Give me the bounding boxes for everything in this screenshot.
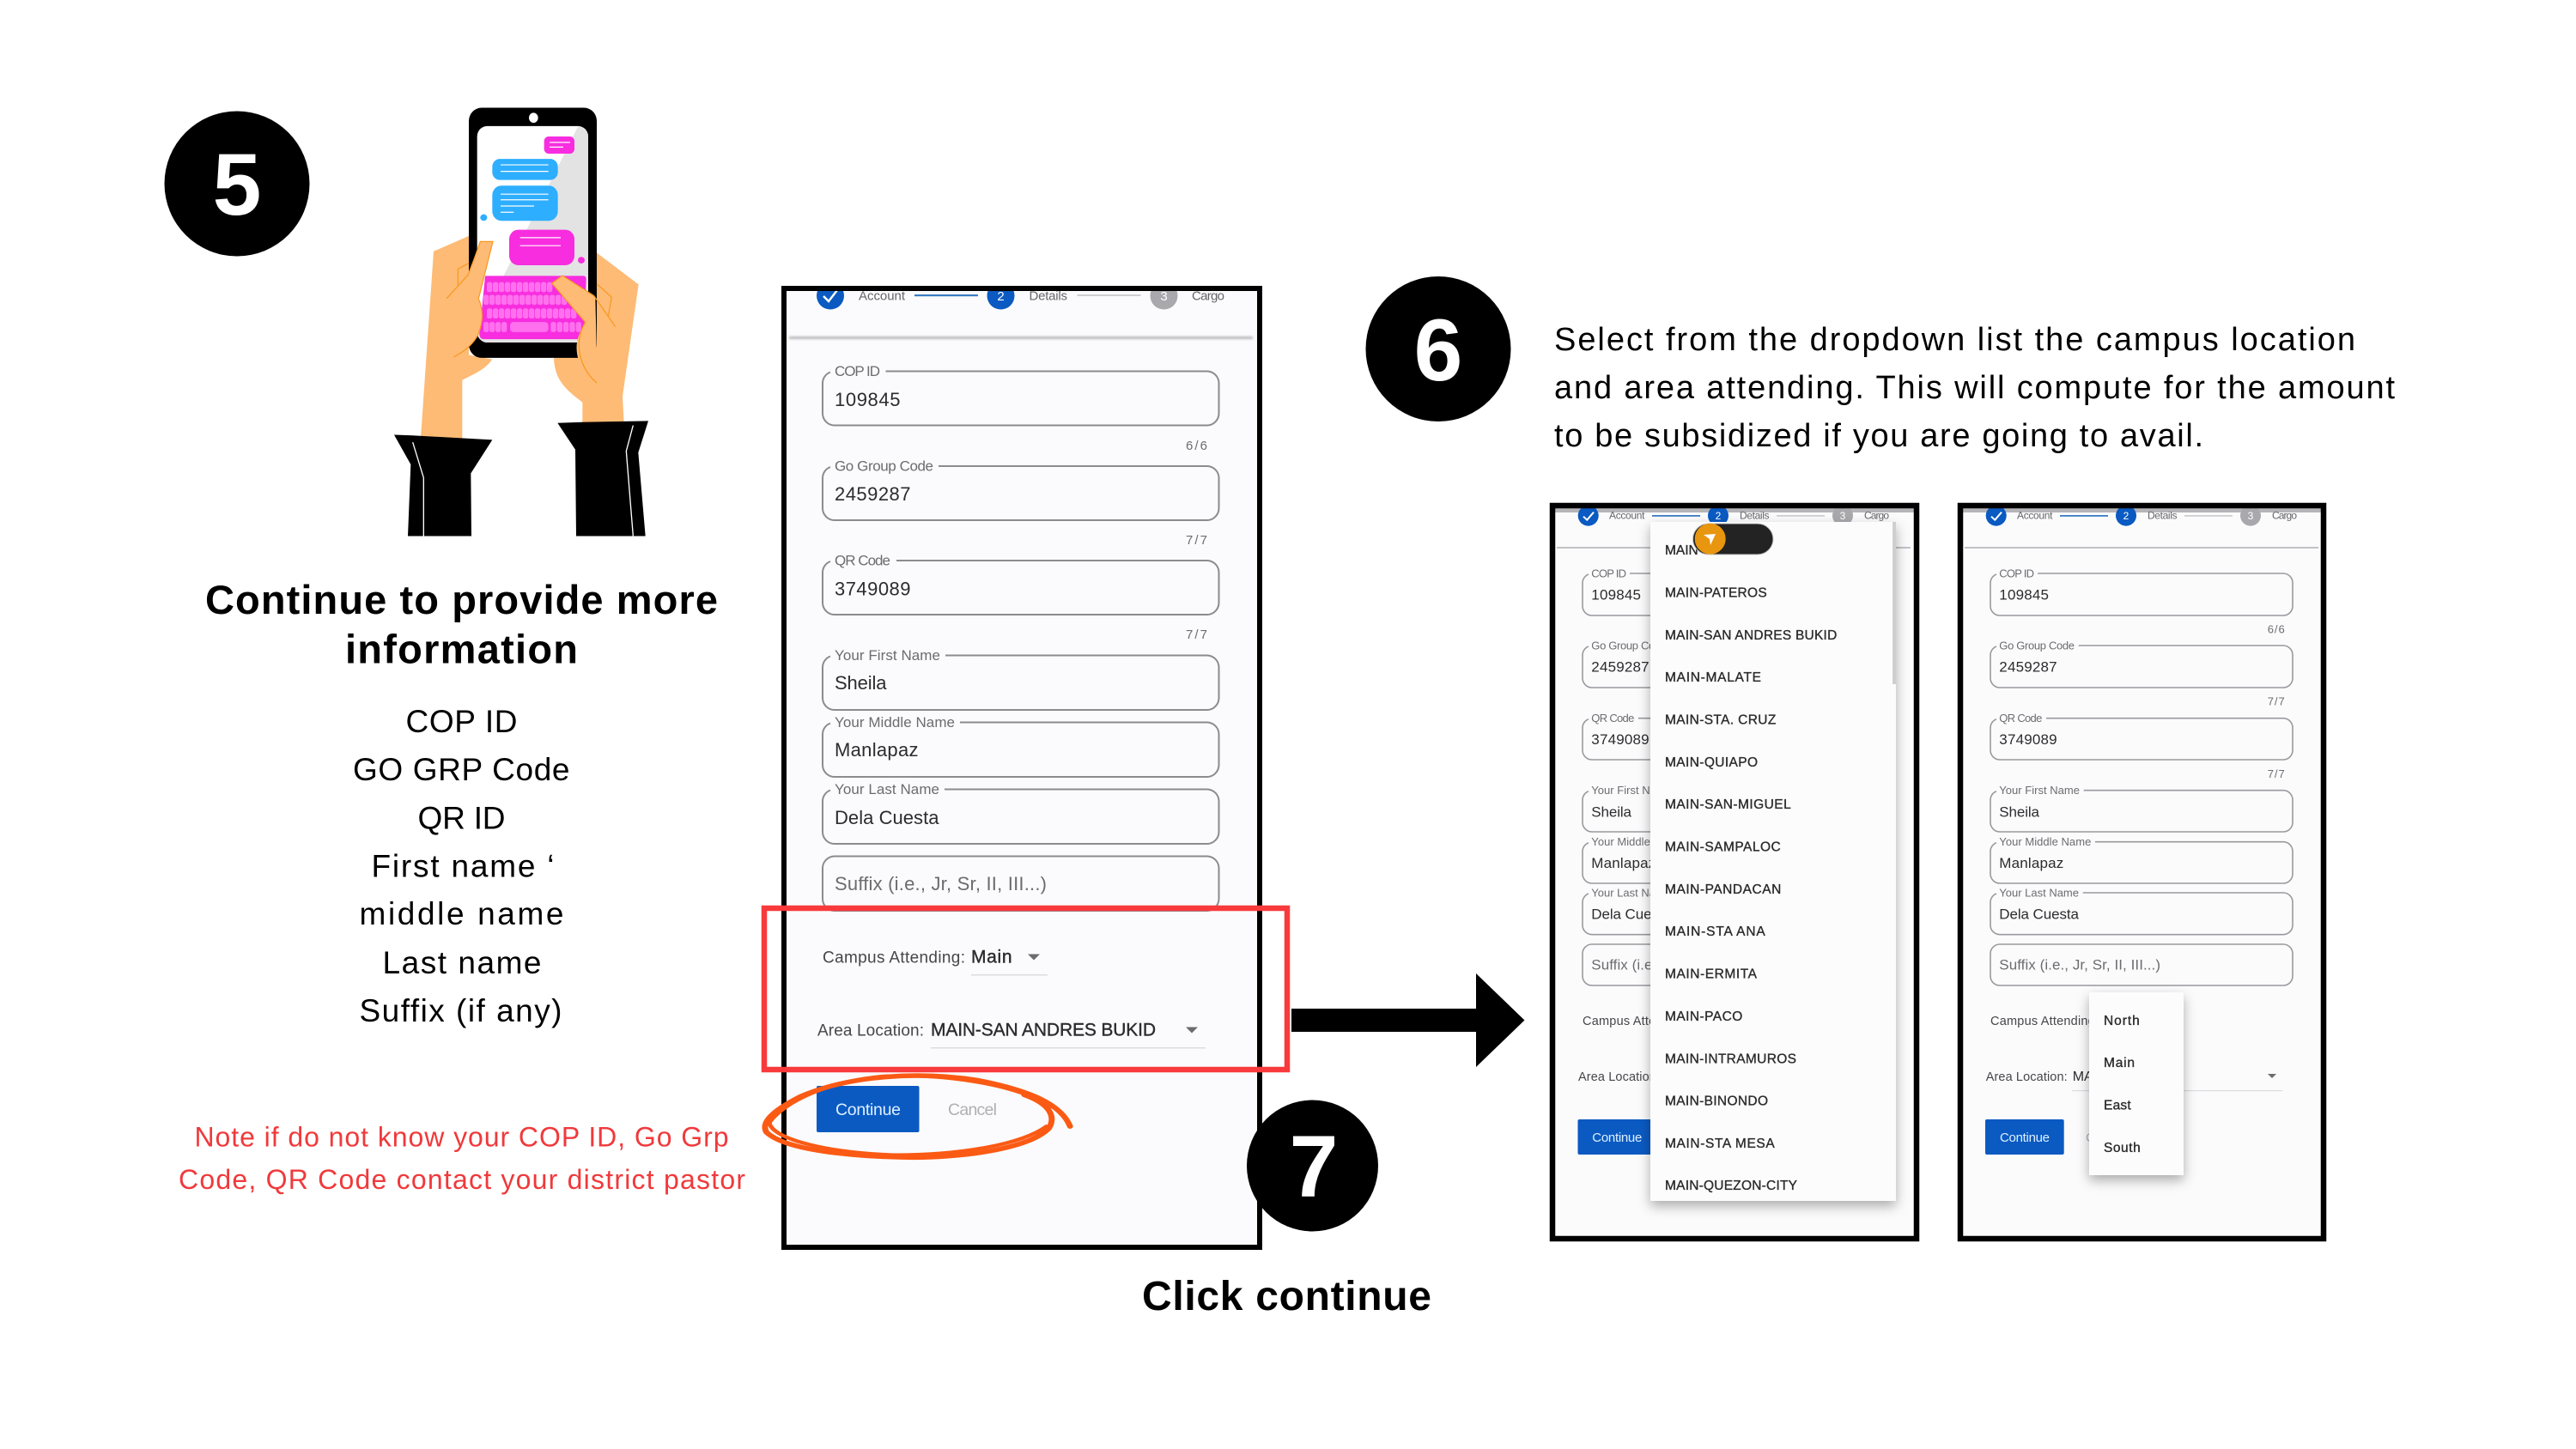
select: area location: MAIN bbox=[2073, 1070, 2107, 1084]
dropdown menu: area locations: MAIN-BINONDO bbox=[1665, 1094, 1768, 1109]
panel: campus dropdown screenshot bbox=[1960, 506, 2324, 1239]
panel frame bbox=[784, 288, 1260, 1247]
dropdown menu: area locations: MAIN-PACO bbox=[1665, 1009, 1742, 1024]
select: area location: MAIN-SAN ANDRES BUKID bbox=[931, 1020, 1156, 1040]
fields behind menu: Continue bbox=[1592, 1131, 1642, 1145]
label: click continue: Click continue bbox=[1142, 1274, 1431, 1319]
left sleeve bbox=[394, 435, 492, 536]
field: middle name bbox=[1990, 835, 2293, 883]
stepper: Account bbox=[1609, 510, 1645, 522]
red highlight rectangle bbox=[764, 908, 1287, 1070]
step 5 badge: 5 bbox=[213, 136, 261, 233]
fields behind menu bbox=[1578, 567, 1885, 1155]
field: QR Code: 7/7 bbox=[1186, 627, 1207, 642]
phone screen bbox=[477, 126, 588, 343]
dropdown menu: campuses: North bbox=[2104, 1014, 2140, 1028]
select: area location: Area Location: bbox=[817, 1022, 924, 1040]
field: last name: Your Last Name bbox=[1999, 886, 2079, 900]
field: suffix: Suffix (i.e., Jr, Sr, II, III...) bbox=[1999, 956, 2160, 973]
fields behind menu: Campus Attending: bbox=[1583, 1015, 1691, 1028]
step 6 instructions: to be subsidized if you are going to avail. bbox=[1554, 418, 2203, 454]
field: first name: Sheila bbox=[1999, 803, 2040, 820]
field: QR Code bbox=[1990, 712, 2293, 780]
phone camera bbox=[529, 112, 538, 123]
stepper: Account bbox=[2017, 510, 2053, 522]
list of required fields: First name ‘ bbox=[371, 848, 555, 884]
field: last name bbox=[823, 781, 1219, 844]
dropdown menu: campuses: East bbox=[2104, 1099, 2131, 1113]
field: Go Group Code: 2459287 bbox=[1999, 659, 2057, 676]
dropdown menu: area locations: MAIN-QUIAPO bbox=[1665, 755, 1758, 770]
field: COP ID bbox=[1990, 567, 2293, 635]
dropdown menu: area locations: MAIN-STA. CRUZ bbox=[1665, 712, 1776, 728]
cancel button: Cancel bbox=[948, 1100, 997, 1119]
step 6 instructions bbox=[1554, 322, 2395, 454]
field: COP ID bbox=[823, 363, 1219, 453]
step 6 badge: 6 bbox=[1414, 301, 1462, 399]
stepper: Details bbox=[2148, 510, 2178, 522]
field: COP ID: 109845 bbox=[835, 389, 900, 410]
continue button: Continue bbox=[835, 1100, 901, 1119]
field: QR Code bbox=[823, 553, 1219, 642]
stepper: 3 bbox=[1840, 510, 1846, 522]
dropdown menu: area locations: MAIN-STA ANA bbox=[1665, 925, 1765, 939]
stepper: Details bbox=[1740, 510, 1769, 522]
dropdown menu: area locations: MAIN-PATEROS bbox=[1665, 585, 1767, 601]
fields behind menu: Manlapaz bbox=[1591, 855, 1656, 871]
field: first name: Your First Name bbox=[835, 647, 940, 664]
field: last name: Dela Cuesta bbox=[835, 807, 939, 828]
dropdown menu: area locations: MAIN bbox=[1665, 543, 1698, 558]
fields behind menu: Sheila bbox=[1591, 803, 1632, 820]
field: first name: Your First Name bbox=[1999, 784, 2080, 797]
field: Go Group Code: 2459287 bbox=[835, 483, 910, 505]
select: campus attending: Main bbox=[971, 948, 1012, 967]
screen glare bbox=[478, 126, 588, 343]
dropdown menu: campuses bbox=[2089, 992, 2184, 1175]
dropdown menu: area locations: MAIN-ERMITA bbox=[1665, 967, 1758, 982]
field: COP ID: 6/6 bbox=[1186, 439, 1207, 453]
select: area location bbox=[1986, 1070, 2282, 1091]
select: area location: Area Location: bbox=[1986, 1070, 2068, 1084]
left hand bbox=[421, 236, 492, 440]
toggle overlay bbox=[1693, 524, 1773, 555]
step 6 badge bbox=[1365, 276, 1511, 421]
heading: continue to provide more information bbox=[205, 577, 718, 671]
dropdown menu: area locations: MAIN-INTRAMUROS bbox=[1665, 1052, 1796, 1066]
dropdown menu: campuses: Main bbox=[2104, 1056, 2135, 1070]
field: suffix: Suffix (i.e., Jr, Sr, II, III...) bbox=[835, 873, 1047, 894]
heading: continue to provide more information: Continue to provide more bbox=[205, 577, 718, 622]
stepper: Cargo bbox=[1864, 510, 1889, 522]
field: last name: Dela Cuesta bbox=[1999, 906, 2080, 922]
red note bbox=[179, 1121, 745, 1195]
field: COP ID: 109845 bbox=[1999, 586, 2049, 603]
fields behind menu: Suffix (i.e., Jr, Sr, II, III...) bbox=[1591, 956, 1753, 973]
illustration: hands holding phone bbox=[394, 108, 648, 536]
dropdown menu: area locations: MAIN-PANDACAN bbox=[1665, 882, 1781, 897]
fields behind menu: QR Code bbox=[1591, 712, 1634, 724]
step 7 badge: 7 bbox=[1290, 1118, 1338, 1216]
stepper: 3 bbox=[2248, 510, 2254, 522]
list of required fields: Last name bbox=[383, 945, 541, 980]
list of required fields: COP ID bbox=[405, 704, 517, 739]
fields behind menu: Go Group Code bbox=[1591, 639, 1667, 652]
dropdown menu: area locations: MAIN-SAN-MIGUEL bbox=[1665, 797, 1791, 812]
field: QR Code: QR Code bbox=[1999, 712, 2042, 724]
field: middle name bbox=[823, 714, 1219, 777]
field: last name bbox=[1990, 886, 2293, 935]
step 7 badge bbox=[1247, 1100, 1378, 1231]
list of required fields: GO GRP Code bbox=[353, 752, 570, 787]
dropdown menu: area locations: MAIN-QUEZON-CITY bbox=[1665, 1179, 1797, 1193]
field: COP ID: COP ID bbox=[1999, 567, 2034, 580]
continue button bbox=[817, 1086, 919, 1132]
dropdown menu: area locations: MAIN-MALATE bbox=[1665, 670, 1761, 685]
fields behind menu: Your Middle Name bbox=[1591, 835, 1683, 848]
right sleeve bbox=[557, 421, 648, 536]
dropdown menu: area locations: MAIN-STA MESA bbox=[1665, 1137, 1775, 1151]
fields behind menu: Your Last Name bbox=[1591, 886, 1671, 900]
field: COP ID: COP ID bbox=[835, 363, 880, 379]
fields behind menu: 3749089 bbox=[1591, 731, 1649, 748]
field: Go Group Code bbox=[823, 458, 1219, 548]
red note: Code, QR Code contact your district pastor bbox=[179, 1164, 745, 1195]
field: last name: Your Last Name bbox=[835, 781, 939, 797]
select: campus attending bbox=[823, 948, 1048, 975]
continue button bbox=[1985, 1119, 2064, 1155]
arrow to dropdown panels bbox=[1291, 973, 1525, 1067]
stepper bbox=[1965, 506, 2318, 549]
field: Go Group Code: 7/7 bbox=[1186, 533, 1207, 548]
field: middle name: Your Middle Name bbox=[835, 714, 955, 731]
stepper: account, details, cargo bbox=[788, 291, 1254, 340]
heading: continue to provide more information: information bbox=[345, 627, 578, 671]
fields behind menu: Area Location: bbox=[1578, 1070, 1660, 1084]
chat bubbles bbox=[480, 136, 585, 265]
hand outlines bbox=[447, 241, 616, 383]
stepper: account, details, cargo: Account bbox=[859, 288, 906, 304]
fields behind menu: COP ID bbox=[1591, 567, 1626, 580]
stepper: account, details, cargo: 2 bbox=[997, 289, 1005, 304]
right thumb overlay bbox=[552, 276, 597, 364]
step 5 badge bbox=[165, 112, 309, 256]
stepper: 2 bbox=[1716, 510, 1722, 522]
select: campus attending: Campus Attending: bbox=[823, 949, 965, 967]
field: suffix bbox=[823, 857, 1219, 911]
field: QR Code: QR Code bbox=[835, 553, 890, 568]
field: first name bbox=[1990, 784, 2293, 832]
field: COP ID: 6/6 bbox=[2268, 622, 2285, 635]
left thumb overlay bbox=[440, 241, 493, 358]
fields behind menu: 109845 bbox=[1591, 586, 1641, 603]
list of required fields bbox=[353, 704, 570, 1028]
step 6 instructions: and area attending. This will compute for the amount bbox=[1554, 370, 2395, 406]
dropdown menu: campuses: South bbox=[2104, 1141, 2141, 1155]
list of required fields: Suffix (if any) bbox=[359, 993, 562, 1028]
panel frame bbox=[1552, 506, 1917, 1239]
stepper: account, details, cargo: 3 bbox=[1160, 289, 1168, 304]
right hand bbox=[554, 252, 639, 423]
field: QR Code: 3749089 bbox=[835, 579, 910, 599]
orange scribble around continue bbox=[765, 1076, 1070, 1157]
fields behind menu: Your First Name bbox=[1591, 784, 1672, 797]
field: middle name: Your Middle Name bbox=[1999, 835, 2091, 848]
stepper: Cargo bbox=[2272, 510, 2297, 522]
list of required fields: middle name bbox=[359, 896, 563, 931]
field: first name: Sheila bbox=[835, 672, 887, 694]
dropdown menu: area locations: MAIN-SAMPALOC bbox=[1665, 840, 1781, 855]
keyboard bbox=[479, 276, 586, 339]
fields behind menu: Dela Cuesta bbox=[1591, 906, 1672, 922]
dropdown menu: area locations bbox=[1650, 522, 1896, 1201]
stepper: account, details, cargo: Details bbox=[1029, 288, 1067, 304]
panel frame bbox=[1960, 506, 2324, 1239]
sleeve highlights bbox=[413, 426, 633, 536]
field: Go Group Code: Go Group Code bbox=[835, 458, 933, 474]
field: suffix bbox=[1990, 944, 2293, 985]
stepper: 2 bbox=[2123, 510, 2129, 522]
list of required fields: QR ID bbox=[417, 800, 505, 836]
stepper bbox=[1557, 506, 1911, 549]
cancel button: Cancel bbox=[2086, 1131, 2126, 1145]
panel: main form screenshot bbox=[784, 282, 1260, 1247]
field: middle name: Manlapaz bbox=[835, 739, 919, 761]
step 6 instructions: Select from the dropdown list the campus location bbox=[1554, 322, 2355, 358]
red note: Note if do not know your COP ID, Go Grp bbox=[194, 1121, 728, 1152]
select: area location bbox=[817, 1020, 1206, 1049]
field: middle name: Manlapaz bbox=[1999, 855, 2063, 871]
fields behind menu: 2459287 bbox=[1591, 659, 1649, 676]
select: campus attending: Campus Attending: bbox=[1990, 1015, 2099, 1028]
field: Go Group Code bbox=[1990, 639, 2293, 708]
continue button: Continue bbox=[2000, 1131, 2050, 1145]
phone body bbox=[469, 108, 597, 358]
field: Go Group Code: 7/7 bbox=[2268, 695, 2285, 708]
field: Go Group Code: Go Group Code bbox=[1999, 639, 2075, 652]
panel: area location dropdown screenshot bbox=[1552, 506, 1917, 1239]
field: QR Code: 3749089 bbox=[1999, 731, 2057, 748]
field: QR Code: 7/7 bbox=[2268, 767, 2285, 780]
stepper: account, details, cargo: Cargo bbox=[1192, 288, 1224, 304]
dropdown menu: area locations: MAIN-SAN ANDRES BUKID bbox=[1665, 628, 1837, 643]
field: first name bbox=[823, 647, 1219, 710]
